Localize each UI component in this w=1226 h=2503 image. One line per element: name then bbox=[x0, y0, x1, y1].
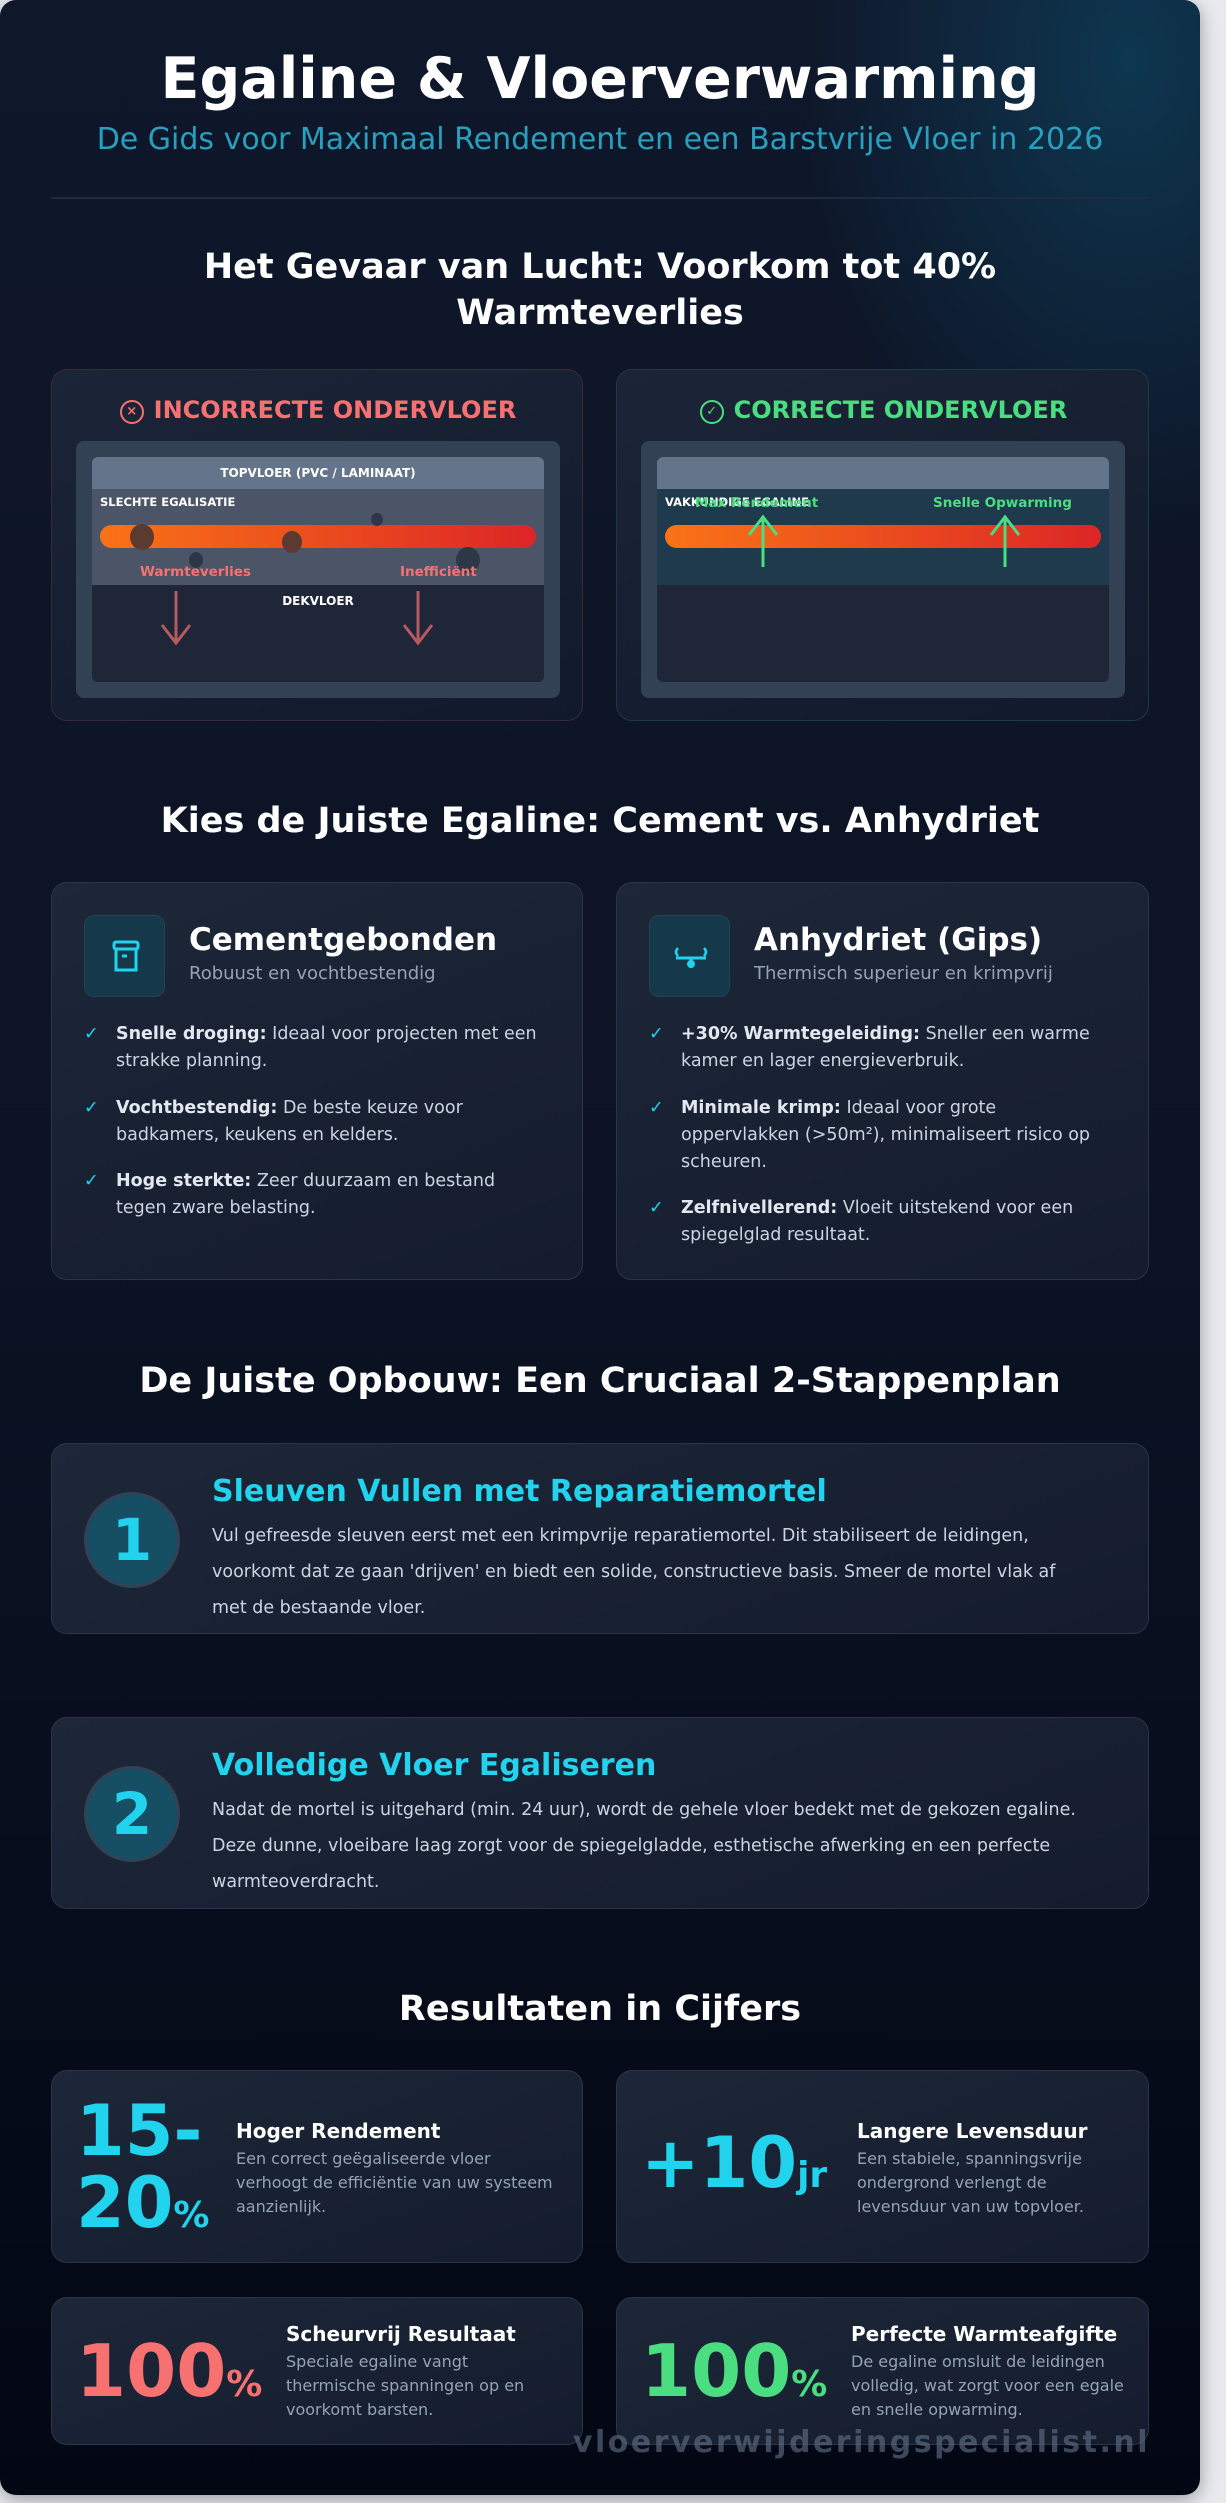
bullets cement: Hoge sterkte: Zeer duurzaam en bestand tegen zware belasting. bbox=[116, 1171, 495, 1218]
panel: incorrecte ondervloer bbox=[51, 369, 583, 721]
stat: hoger rendement bbox=[51, 2070, 583, 2263]
diagram incorrect: TOPVLOER (PVC / LAMINAAT) bbox=[220, 466, 416, 480]
diagram incorrect: SLECHTE EGALISATIE bbox=[100, 495, 235, 509]
step text: Vul gefreesde sleuven eerst met een krimpvrije reparatiemortel. Dit stabiliseert de leidingen, voorkomt dat ze gaan 'drijven' en biedt een solide, constructieve basis. Smeer de mortel vlak af met de bestaande vloer. bbox=[212, 1526, 1055, 1618]
diagram incorrect: DEKVLOER bbox=[282, 594, 354, 608]
stat: warmteafgifte: De egaline omsluit de leidingen volledig, wat zorgt voor een egale en snelle opwarming. bbox=[851, 2352, 1124, 2419]
bullets anhydriet bbox=[652, 1024, 1090, 1245]
card title: Anhydriet (Gips) bbox=[754, 922, 1042, 958]
bullets anhydriet: Minimale krimp: Ideaal voor grote oppervlakken (>50m²), minimaliseert risico op scheuren. bbox=[681, 1098, 1090, 1172]
heading: kies de juiste egaline: Kies de Juiste Egaline: Cement vs. Anhydriet bbox=[161, 801, 1039, 841]
diagram correct: Max Rendement bbox=[695, 495, 818, 511]
bullets cement: Vochtbestendig: De beste keuze voor badkamers, keukens en kelders. bbox=[116, 1098, 463, 1145]
step title: Volledige Vloer Egaliseren bbox=[212, 1748, 656, 1783]
step 2 bbox=[51, 1717, 1149, 1909]
diagram correct: VAKKUNDIGE EGALINE bbox=[665, 495, 809, 509]
diagram incorrect: Warmteverlies bbox=[140, 564, 251, 580]
panel heading correct: CORRECTE ONDERVLOER bbox=[734, 396, 1067, 424]
heading: gevaar van lucht bbox=[204, 247, 996, 333]
diagram incorrect: Inefficiënt bbox=[400, 564, 477, 580]
panel: correcte ondervloer bbox=[616, 369, 1149, 721]
icon: heat bbox=[649, 915, 730, 997]
diagram correct: Snelle Opwarming bbox=[933, 495, 1072, 511]
diagram correct bbox=[641, 441, 1125, 698]
panel heading incorrect: × bbox=[126, 404, 137, 419]
card title: Cementgebonden bbox=[189, 922, 497, 958]
stat: warmteafgifte bbox=[616, 2297, 1149, 2445]
card: anhydriet bbox=[616, 882, 1149, 1280]
stat: levensduur: +10jr bbox=[641, 2122, 827, 2204]
bullets cement bbox=[86, 1024, 537, 1218]
panel heading correct: ✓ bbox=[706, 404, 717, 419]
step title: Sleuven Vullen met Reparatiemortel bbox=[212, 1474, 827, 1509]
bullets anhydriet: Zelfnivellerend: Vloeit uitstekend voor een spiegelglad resultaat. bbox=[681, 1198, 1073, 1245]
stat: hoger rendement: Hoger Rendement bbox=[236, 2119, 440, 2143]
card: cementgebonden bbox=[51, 882, 583, 1280]
title: Egaline & Vloerverwarming bbox=[161, 46, 1039, 112]
watermark: vloerverwijderingspecialist.nl bbox=[573, 2425, 1150, 2460]
stat: levensduur: Langere Levensduur bbox=[857, 2119, 1087, 2143]
card: cementgebonden: Robuust en vochtbestendig bbox=[189, 963, 436, 984]
stat: scheurvrij bbox=[51, 2297, 583, 2445]
stat: scheurvrij: 100% bbox=[76, 2329, 262, 2413]
step text: Nadat de mortel is uitgehard (min. 24 uur), wordt de gehele vloer bedekt met de gekozen egaline. Deze dunne, vloeibare laag zorgt voor de spiegelgladde, esthetische afwerking en een perfecte warmteoverdracht. bbox=[212, 1800, 1076, 1892]
stat: scheurvrij: Scheurvrij Resultaat bbox=[286, 2322, 516, 2346]
panel heading incorrect: INCORRECTE ONDERVLOER bbox=[154, 396, 516, 424]
step number 1: 1 bbox=[112, 1506, 152, 1574]
stat: levensduur bbox=[616, 2070, 1149, 2263]
step number 2: 2 bbox=[112, 1780, 152, 1848]
step number 2 bbox=[84, 1766, 180, 1862]
stat: hoger rendement: 15- bbox=[76, 2090, 202, 2172]
stat: hoger rendement: Een correct geëgaliseerde vloer verhoogt de efficiëntie van uw systeem aanzienlijk. bbox=[236, 2149, 553, 2216]
step 1 bbox=[51, 1443, 1149, 1634]
icon: bucket bbox=[84, 915, 165, 997]
heading: opbouw: De Juiste Opbouw: Een Cruciaal 2-Stappenplan bbox=[139, 1361, 1061, 1401]
card: anhydriet: Thermisch superieur en krimpvrij bbox=[754, 963, 1053, 984]
bullets cement: Snelle droging: Ideaal voor projecten met een strakke planning. bbox=[116, 1024, 537, 1071]
stat: levensduur: Een stabiele, spanningsvrije ondergrond verlengt de levensduur van uw topvloer. bbox=[857, 2149, 1084, 2216]
stat: scheurvrij: Speciale egaline vangt thermische spanningen op en voorkomt barsten. bbox=[286, 2352, 524, 2419]
heading: gevaar van lucht: Warmteverlies bbox=[456, 293, 744, 333]
stat: warmteafgifte: 100% bbox=[641, 2329, 827, 2413]
stat: warmteafgifte: Perfecte Warmteafgifte bbox=[851, 2322, 1117, 2346]
stat: hoger rendement: 20% bbox=[76, 2162, 210, 2244]
diagram incorrect bbox=[76, 441, 560, 698]
heading: resultaten: Resultaten in Cijfers bbox=[399, 1989, 801, 2029]
bullets anhydriet: +30% Warmtegeleiding: Sneller een warme kamer en lager energieverbruik. bbox=[681, 1024, 1090, 1071]
heading: gevaar van lucht: Het Gevaar van Lucht: Voorkom tot 40% bbox=[204, 247, 996, 287]
step number 1 bbox=[84, 1492, 180, 1588]
subtitle: De Gids voor Maximaal Rendement en een Barstvrije Vloer in 2026 bbox=[97, 122, 1103, 157]
